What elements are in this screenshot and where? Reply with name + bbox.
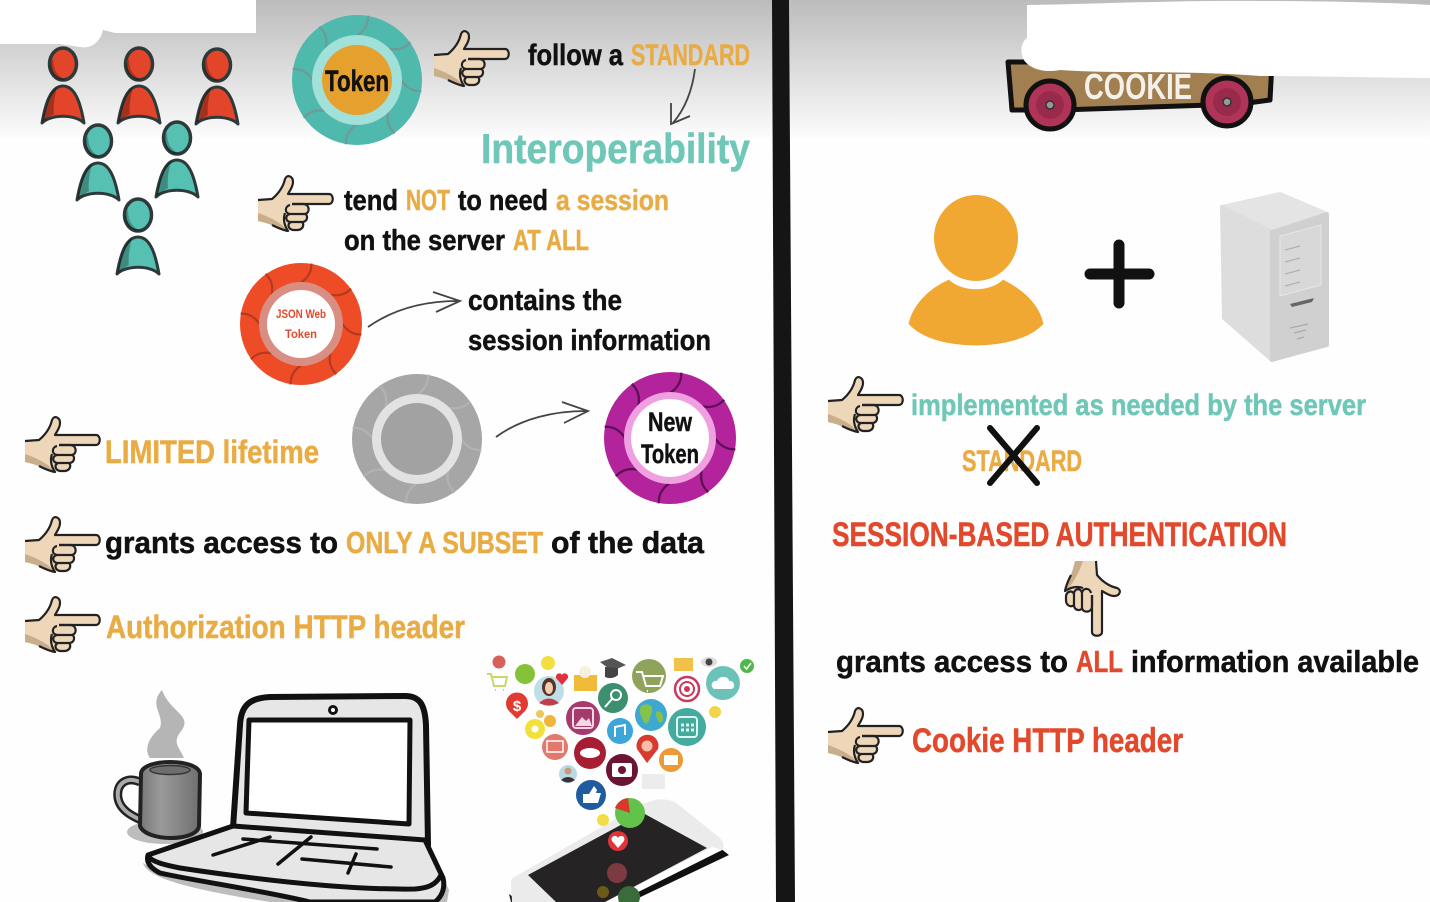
arrow: old to new token [496,402,588,437]
text: subset of data: grants access to [105,525,338,560]
icon cluster: apps and social icons: $ [513,698,522,715]
icon: new token chip [604,372,736,504]
text: session not needed: a session [556,185,669,217]
icon: cookie cart [1008,62,1272,129]
icon: user [908,195,1044,346]
text: follow a standard [528,39,750,72]
text: contains session information: contains the [468,285,622,317]
icon: token chip: Token [325,65,389,98]
icon: token chip [292,15,422,145]
icon: pointing hand 2 [258,176,333,231]
text: grants access to all [836,644,1419,679]
text: follow a standard: STANDARD [631,39,750,72]
icon: new token chip: New [648,407,693,437]
icon: smartphone [509,799,729,902]
icon: new token chip: Token [641,439,699,469]
panel: token (left) [25,15,754,902]
icon: expired grey token [352,374,482,504]
text: contains session information: session information [468,325,711,357]
text: session not needed: NOT [406,185,450,217]
text: follow a standard: follow a [528,39,623,72]
white mask: top right [1021,1,1430,78]
white mask: top left [0,0,256,47]
center divider [772,0,795,902]
panel: session (right) [828,62,1419,763]
icon: coffee mug [118,690,203,844]
text: authorization header: Authorization HTTP header [106,609,465,645]
text: limited lifetime: LIMITED lifetime [105,434,319,470]
icon cluster: apps and social icons [487,656,754,828]
icon: pointing hand 4 [25,517,100,572]
icon: cookie cart: COOKIE [1084,66,1192,107]
text: session not needed [344,185,669,257]
icon: JSON Web Token chip [240,263,362,385]
icon: pointing hand 5 [25,597,100,652]
icon: laptop [143,696,449,902]
text: subset of data: ONLY A SUBSET [346,525,543,560]
text: session not needed: to need [458,185,548,217]
text: grants access to all: ALL [1076,644,1123,679]
text: subset of data: of the data [551,525,705,560]
icon: JSON Web Token chip: Token [285,327,317,341]
icon: pointing hand 3 [25,417,100,472]
icon: pointing hand 6 [828,377,903,432]
arrow: JWT to session information [368,292,460,327]
text: session not needed: AT ALL [513,225,589,257]
text: session not needed: tend [344,185,398,217]
text: crossed-out standard [962,428,1082,483]
icon: plus [1090,245,1149,303]
text: subset of data [105,525,705,560]
heading: session-based authentication: SESSION-BASED AUTHENTICATION [832,516,1287,554]
heading: interoperability: Interoperability [481,125,751,172]
text: contains session information [468,285,711,357]
icon: people network [42,48,238,274]
text: crossed-out standard: STANDARD [962,445,1082,478]
icon: server tower [1222,194,1327,360]
text: grants access to all: grants access to [836,644,1068,679]
text: session not needed: on the server [344,225,505,257]
icon: JSON Web Token chip: JSON Web [276,307,326,321]
text: cookie header: Cookie HTTP header [912,722,1183,760]
icon: pointing hand 1 [434,31,509,86]
icon: pointing hand 7 [828,708,903,763]
icon: hand pointing down [1065,561,1120,636]
arrow: standard to interoperability [671,69,695,124]
